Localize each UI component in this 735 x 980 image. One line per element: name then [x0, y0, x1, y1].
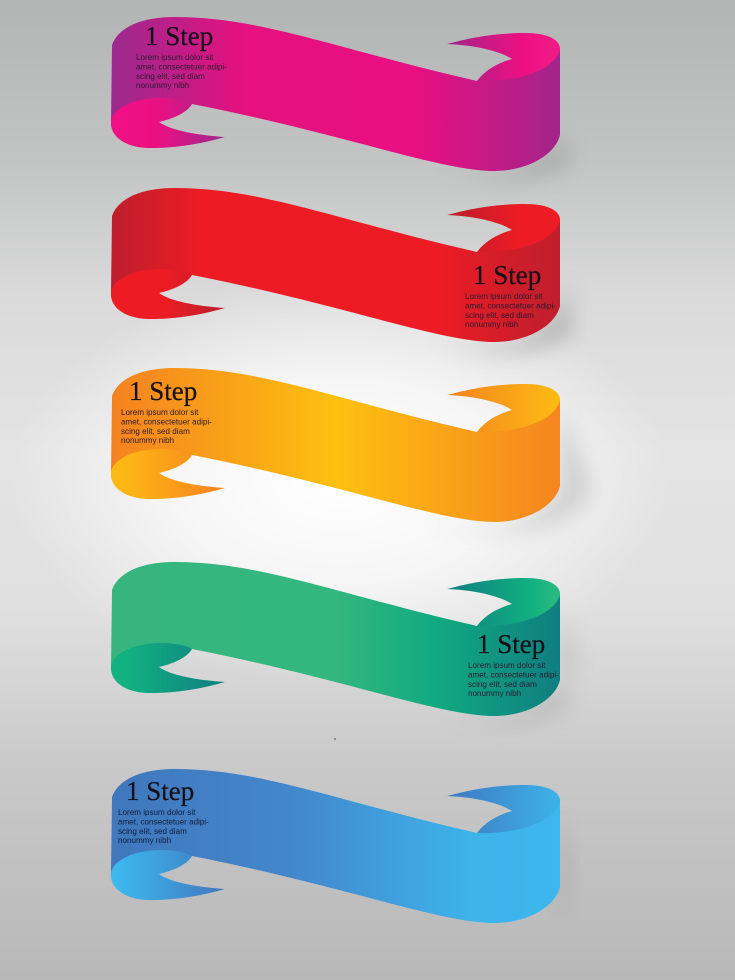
panel: ribbon 2 red — [111, 188, 572, 354]
ribbon 1 left fold — [111, 98, 225, 148]
ribbon 4 left fold — [111, 643, 225, 693]
text block: ribbon 1: scing elit, sed diam — [136, 72, 205, 81]
ribbon 3 left fold — [111, 449, 225, 499]
text block: ribbon 4: nonummy nibh — [468, 689, 521, 698]
heading: ribbon 5: 1 Step — [126, 776, 194, 806]
text block: ribbon 2: Lorem ipsum dolor sit — [465, 292, 543, 301]
ribbon 3 body — [111, 368, 560, 522]
ribbon 2 right fold — [447, 204, 560, 252]
heading: ribbon 4: 1 Step — [477, 629, 545, 659]
text block: ribbon 1: amet, consectetuer adipi- — [136, 62, 227, 72]
text block: ribbon 3: Lorem ipsum dolor sit — [121, 408, 199, 417]
heading: ribbon 3: 1 Step — [129, 376, 197, 406]
shadow: ribbon 3 — [420, 411, 590, 533]
ribbon 5 left fold — [111, 850, 225, 900]
text block: ribbon 3: amet, consectetuer adipi- — [121, 418, 212, 426]
ribbon 1 body — [111, 17, 560, 171]
ribbon 5 right fold — [447, 785, 560, 833]
text block: ribbon 3: nonummy nibh — [121, 436, 174, 445]
panel: ribbon 4 green — [111, 562, 575, 724]
ribbon 4 body — [111, 562, 560, 716]
ribbon 2 left fold — [111, 269, 225, 319]
heading: ribbon 1: 1 Step — [145, 21, 213, 51]
stray dot — [334, 738, 336, 740]
text block: ribbon 5: Lorem ipsum dolor sit — [118, 808, 196, 817]
shadow: ribbon 1 — [440, 135, 568, 180]
ribbon 4 right fold — [447, 578, 560, 626]
text block: ribbon 3: scing elit, sed diam — [121, 427, 190, 436]
text block: ribbon 5: scing elit, sed diam — [118, 827, 187, 836]
ribbon 5 body — [111, 769, 560, 923]
text block: ribbon 2: amet, consectetuer adipi- — [465, 302, 556, 310]
shadow: ribbon 5 — [556, 812, 572, 917]
panel: ribbon 5 blue — [111, 769, 572, 923]
text block: ribbon 5: amet, consectetuer adipi- — [118, 818, 209, 826]
text block: ribbon 2: nonummy nibh — [465, 320, 518, 329]
ribbon 2 body — [111, 188, 560, 342]
text block: ribbon 1: Lorem ipsum dolor sit — [136, 53, 214, 62]
shadow: ribbon 2 — [430, 281, 572, 354]
heading: ribbon 2: 1 Step — [473, 260, 541, 290]
shadow: ribbon 4 — [440, 605, 575, 724]
text block: ribbon 4: scing elit, sed diam — [468, 680, 537, 689]
text block: ribbon 4: amet, consectetuer adipi- — [468, 670, 559, 680]
text block: ribbon 2: scing elit, sed diam — [465, 311, 534, 320]
ribbon 3 right fold — [447, 384, 560, 432]
text block: ribbon 5: nonummy nibh — [118, 836, 171, 845]
panel: ribbon 3 orange — [111, 368, 590, 533]
ribbon 1 right fold — [447, 33, 560, 81]
panel: ribbon 1 magenta — [111, 17, 568, 180]
text block: ribbon 1: nonummy nibh — [136, 81, 189, 90]
text block: ribbon 4: Lorem ipsum dolor sit — [468, 661, 546, 670]
